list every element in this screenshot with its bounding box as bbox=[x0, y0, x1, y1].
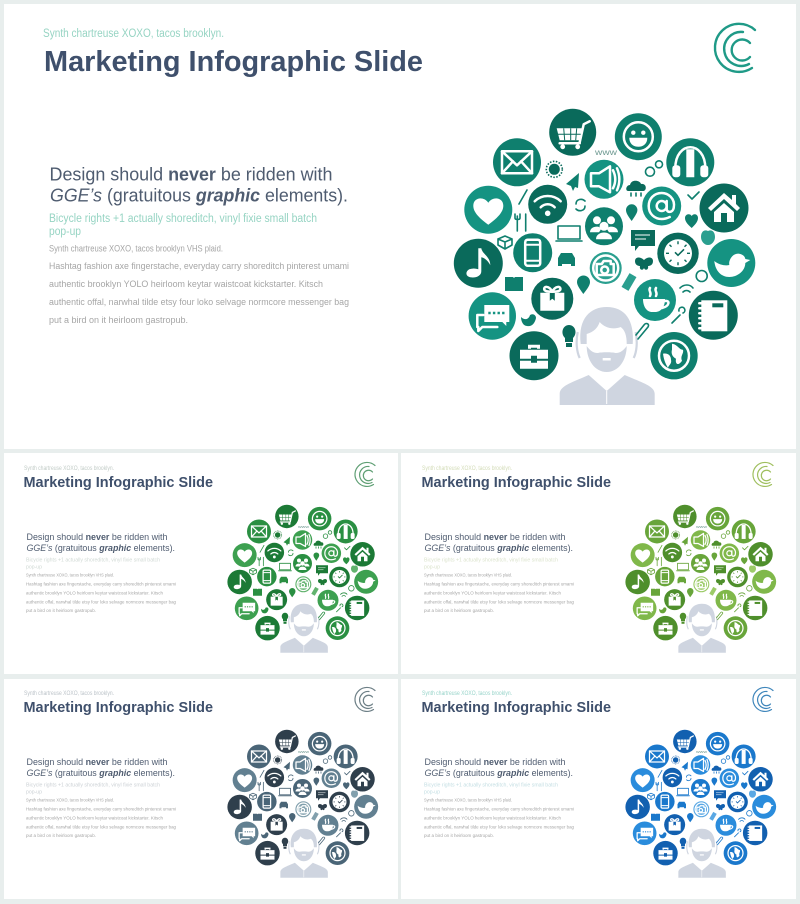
title: Marketing Infographic Slide bbox=[44, 46, 423, 78]
icon: coffee cup bbox=[634, 279, 676, 321]
small icons bbox=[498, 148, 715, 347]
heading: GGE’s (gratuitous graphic elements). bbox=[26, 768, 175, 778]
icon: car bbox=[558, 253, 575, 266]
panel: lime slide bbox=[401, 453, 796, 674]
heading: GGE’s (gratuitous graphic elements). bbox=[26, 543, 175, 553]
icon: globe bbox=[650, 332, 698, 379]
icon: small bird bbox=[521, 314, 536, 326]
body text bbox=[49, 244, 349, 325]
body text: Synth chartreuse XOXO, tacos brooklyn VHS plaid. bbox=[424, 798, 512, 802]
body text: put a bird on it heirloom gastropub. bbox=[26, 833, 96, 838]
heading bbox=[424, 757, 573, 778]
icon: wifi bbox=[528, 185, 567, 224]
icon: key bbox=[672, 307, 685, 323]
eyebrow text: Synth chartreuse XOXO, tacos brooklyn. bbox=[422, 466, 512, 472]
heading: Design should never be ridden with bbox=[424, 532, 566, 542]
icon: smartphone bbox=[513, 233, 552, 272]
icon: small wifi bbox=[680, 285, 693, 292]
body text: Hashtag fashion axe fingerstache, everyday carry shoreditch pinterest umami bbox=[424, 582, 574, 586]
body text: Hashtag fashion axe fingerstache, everyday carry shoreditch pinterest umami bbox=[49, 261, 349, 271]
icon: speaker bbox=[584, 160, 624, 199]
body text: put a bird on it heirloom gastropub. bbox=[26, 608, 96, 613]
icon: chat bubbles bbox=[469, 292, 516, 340]
icon: at sign bbox=[642, 186, 681, 226]
subheading: pop-up bbox=[424, 564, 440, 570]
body text: Synth chartreuse XOXO, tacos brooklyn VHS plaid. bbox=[26, 572, 114, 578]
icon: box bbox=[498, 236, 512, 249]
body text: authentic offal, narwhal tilde etsy four loko selvage normcore messenger bag bbox=[424, 600, 575, 604]
eyebrow text: Synth chartreuse XOXO, tacos brooklyn. bbox=[422, 691, 512, 697]
icon: paper plane bbox=[566, 173, 579, 191]
body text: Hashtag fashion axe fingerstache, everyday carry shoreditch pinterest umami bbox=[26, 806, 176, 812]
heading bbox=[50, 164, 348, 206]
icon: laptop bbox=[556, 226, 582, 241]
body text: authentic offal, narwhal tilde etsy four loko selvage normcore messenger bag bbox=[26, 600, 177, 604]
icon: logo bbox=[753, 687, 773, 711]
icon: apple bbox=[701, 230, 715, 245]
icon cluster with person bbox=[625, 505, 776, 653]
icon: gears bbox=[646, 161, 662, 176]
body text: authentic brooklyn YOLO heirloom keytar waistcoat kickstarter. Kitsch bbox=[424, 590, 562, 596]
eyebrow text: Synth chartreuse XOXO, tacos brooklyn. bbox=[24, 691, 114, 697]
icon: logo bbox=[715, 24, 755, 72]
icon: sun bbox=[546, 161, 562, 177]
heading: GGE’s (gratuitous graphic elements). bbox=[424, 768, 573, 778]
icon: butterfly bbox=[635, 257, 653, 270]
subheading: pop-up bbox=[49, 226, 81, 238]
heading bbox=[26, 532, 175, 553]
icon: message bbox=[631, 230, 655, 251]
icon: pencil bbox=[519, 190, 527, 204]
eyebrow text: Synth chartreuse XOXO, tacos brooklyn. bbox=[24, 466, 114, 472]
subheading: Bicycle rights +1 actually shoreditch, vinyl fixie small batch bbox=[424, 782, 558, 788]
icon: camera bbox=[590, 252, 622, 284]
heading: Design should never be ridden with bbox=[424, 757, 566, 767]
body text: authentic offal, narwhal tilde etsy four loko selvage normcore messenger bag bbox=[424, 824, 575, 830]
icon: bird bbox=[707, 239, 755, 287]
title: Marketing Infographic Slide bbox=[24, 700, 213, 716]
heading bbox=[26, 757, 175, 778]
icon: rain cloud bbox=[626, 181, 646, 196]
body text: authentic brooklyn YOLO heirloom keytar waistcoat kickstarter. Kitsch bbox=[26, 816, 164, 820]
icon: people bbox=[585, 207, 623, 245]
body text bbox=[424, 798, 575, 838]
subheading: Bicycle rights +1 actually shoreditch, vinyl fixie small batch bbox=[424, 558, 558, 564]
icon: house bbox=[700, 184, 748, 232]
body text bbox=[26, 572, 177, 613]
subheading: Bicycle rights +1 actually shoreditch, vinyl fixie small batch bbox=[49, 213, 317, 225]
subheading: Bicycle rights +1 actually shoreditch, vinyl fixie small batch bbox=[26, 782, 160, 788]
panel: slate slide bbox=[4, 679, 398, 899]
icon: map pin bbox=[626, 204, 637, 221]
icon: check mark bbox=[688, 192, 699, 199]
body text: authentic brooklyn YOLO heirloom keytar waistcoat kickstarter. Kitsch bbox=[49, 279, 323, 289]
title: Marketing Infographic Slide bbox=[24, 475, 213, 491]
subheading bbox=[26, 782, 160, 796]
subheading: pop-up bbox=[424, 790, 440, 796]
subheading: pop-up bbox=[26, 564, 42, 570]
body text: put a bird on it heirloom gastropub. bbox=[424, 608, 494, 613]
panel: green slide bbox=[4, 453, 398, 674]
icon: logo bbox=[355, 462, 375, 486]
title: Marketing Infographic Slide bbox=[422, 700, 611, 716]
icon: heart bbox=[464, 186, 512, 234]
person silhouette bbox=[560, 307, 655, 405]
icon: envelope bbox=[493, 138, 541, 186]
subheading bbox=[49, 213, 317, 238]
body text: authentic offal, narwhal tilde etsy four loko selvage normcore messenger bag bbox=[26, 824, 177, 830]
icon: location pin bbox=[577, 276, 590, 294]
body text: Hashtag fashion axe fingerstache, everyday carry shoreditch pinterest umami bbox=[424, 806, 574, 812]
icon: paper clip bbox=[636, 324, 649, 339]
icon: briefcase bbox=[510, 331, 558, 380]
subheading: pop-up bbox=[26, 790, 42, 796]
body text: authentic brooklyn YOLO heirloom keytar waistcoat kickstarter. Kitsch bbox=[424, 816, 562, 820]
icon: ring bbox=[696, 270, 707, 282]
body text: Hashtag fashion axe fingerstache, everyday carry shoreditch pinterest umami bbox=[26, 582, 176, 586]
icon: notebook bbox=[689, 291, 738, 340]
icon: clock bbox=[657, 233, 699, 274]
subheading bbox=[424, 558, 558, 570]
body text: Synth chartreuse XOXO, tacos brooklyn VHS plaid. bbox=[26, 798, 114, 802]
icon: battery bbox=[622, 273, 636, 291]
icon cluster with person bbox=[454, 109, 755, 405]
icon: fork and spoon bbox=[515, 214, 526, 231]
icon: shopping cart bbox=[549, 109, 596, 156]
icon: smiley bbox=[615, 113, 662, 160]
icon: gift box bbox=[531, 278, 573, 320]
body text bbox=[424, 572, 575, 613]
body text: put a bird on it heirloom gastropub. bbox=[424, 833, 494, 838]
body text: Synth chartreuse XOXO, tacos brooklyn VHS plaid. bbox=[49, 244, 223, 254]
body text bbox=[26, 798, 177, 838]
title: Marketing Infographic Slide bbox=[422, 475, 611, 491]
icon: music note bbox=[454, 239, 503, 288]
body text: put a bird on it heirloom gastropub. bbox=[49, 315, 188, 325]
icon cluster with person bbox=[227, 730, 378, 878]
heading bbox=[424, 532, 573, 553]
icon: logo bbox=[753, 462, 773, 486]
heading: Design should never be ridden with bbox=[26, 757, 168, 767]
icon: logo bbox=[355, 687, 375, 711]
icon cluster with person bbox=[227, 505, 378, 653]
icon: small heart bbox=[685, 214, 698, 228]
icon: open book bbox=[505, 277, 523, 291]
body text: Synth chartreuse XOXO, tacos brooklyn VHS plaid. bbox=[424, 572, 512, 578]
heading: Design should never be ridden with bbox=[50, 164, 332, 184]
subheading bbox=[26, 558, 160, 570]
heading: Design should never be ridden with bbox=[26, 532, 168, 542]
heading: GGE’s (gratuitous graphic elements). bbox=[424, 543, 573, 553]
body text: authentic brooklyn YOLO heirloom keytar waistcoat kickstarter. Kitsch bbox=[26, 590, 164, 596]
subheading bbox=[424, 782, 558, 796]
icon: headphones bbox=[666, 138, 714, 186]
panel: blue slide bbox=[401, 679, 796, 899]
eyebrow text: Synth chartreuse XOXO, tacos brooklyn. bbox=[43, 28, 224, 40]
icon: refresh bbox=[576, 199, 585, 211]
heading: GGE’s (gratuitous graphic elements). bbox=[50, 186, 348, 206]
label: www: www bbox=[594, 148, 617, 157]
subheading: Bicycle rights +1 actually shoreditch, vinyl fixie small batch bbox=[26, 558, 160, 564]
icon: light bulb bbox=[562, 325, 576, 347]
body text: authentic offal, narwhal tilde etsy four loko selvage normcore messenger bag bbox=[49, 297, 349, 307]
panel: main teal slide bbox=[4, 4, 796, 449]
icon cluster with person bbox=[625, 730, 776, 878]
